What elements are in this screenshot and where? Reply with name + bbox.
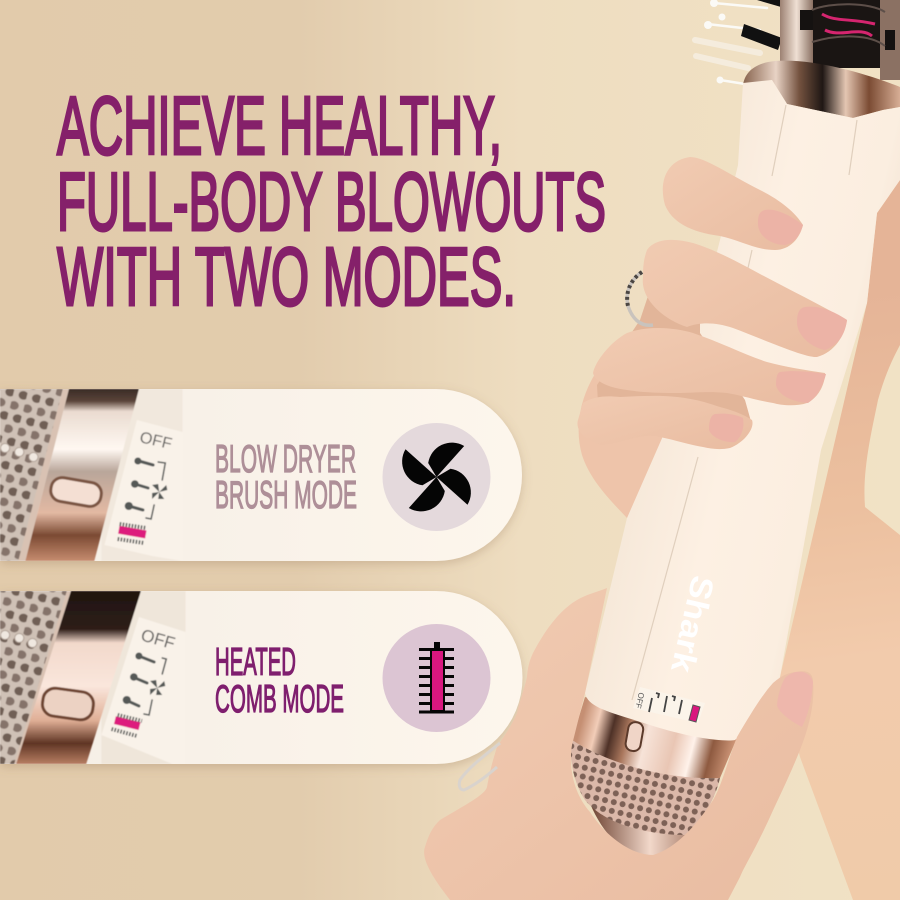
brand name: Shark — [664, 572, 721, 676]
label: blow dryer brush mode: BRUSH MODE — [215, 474, 357, 517]
silver ring on upper hand — [627, 272, 653, 325]
label: blow dryer brush mode — [215, 438, 357, 517]
title: ACHIEVE HEALTHY, — [57, 79, 502, 172]
lower hand with thumb — [424, 588, 813, 900]
label: heated comb mode: HEATED — [215, 641, 296, 684]
label: blow dryer brush mode: BLOW DRYER — [215, 438, 356, 481]
shaded hand mass behind fingers — [597, 260, 752, 440]
product photo: dial set to blow dryer — [0, 389, 183, 561]
index finger — [663, 157, 803, 250]
icon: heated comb — [382, 624, 490, 732]
fingernails — [709, 210, 847, 442]
right forearm and palm — [780, 180, 900, 900]
silver ring on lower hand — [459, 743, 500, 790]
title — [57, 79, 606, 323]
body seams — [632, 105, 857, 700]
rose gold collar — [572, 697, 737, 778]
product photo: dial set to heated comb — [0, 591, 186, 764]
ring finger — [593, 328, 825, 405]
cream styler body — [585, 80, 900, 740]
thumbnail — [777, 672, 813, 727]
photo: hands holding styler — [424, 0, 900, 900]
title: WITH TWO MODES. — [57, 230, 516, 323]
label: heated comb mode — [215, 641, 344, 721]
label: heated comb mode: COMB MODE — [215, 678, 344, 721]
panel: heated comb mode — [0, 591, 522, 764]
mode selector strip — [633, 687, 705, 723]
top rose gold collar — [743, 61, 900, 118]
brush head bristles — [695, 0, 900, 84]
little finger — [577, 396, 753, 449]
panel: blow dryer brush mode — [0, 389, 522, 561]
mode selector strip: OFF — [633, 692, 646, 709]
perforated mesh base — [571, 740, 720, 835]
left palm of upper hand — [579, 355, 670, 518]
product photo: dial set to blow dryer: OFF — [138, 428, 174, 453]
icon: pinwheel fan — [382, 423, 490, 531]
cone base — [585, 790, 710, 855]
product photo: dial set to heated comb: OFF — [139, 626, 177, 653]
middle finger — [643, 240, 847, 357]
